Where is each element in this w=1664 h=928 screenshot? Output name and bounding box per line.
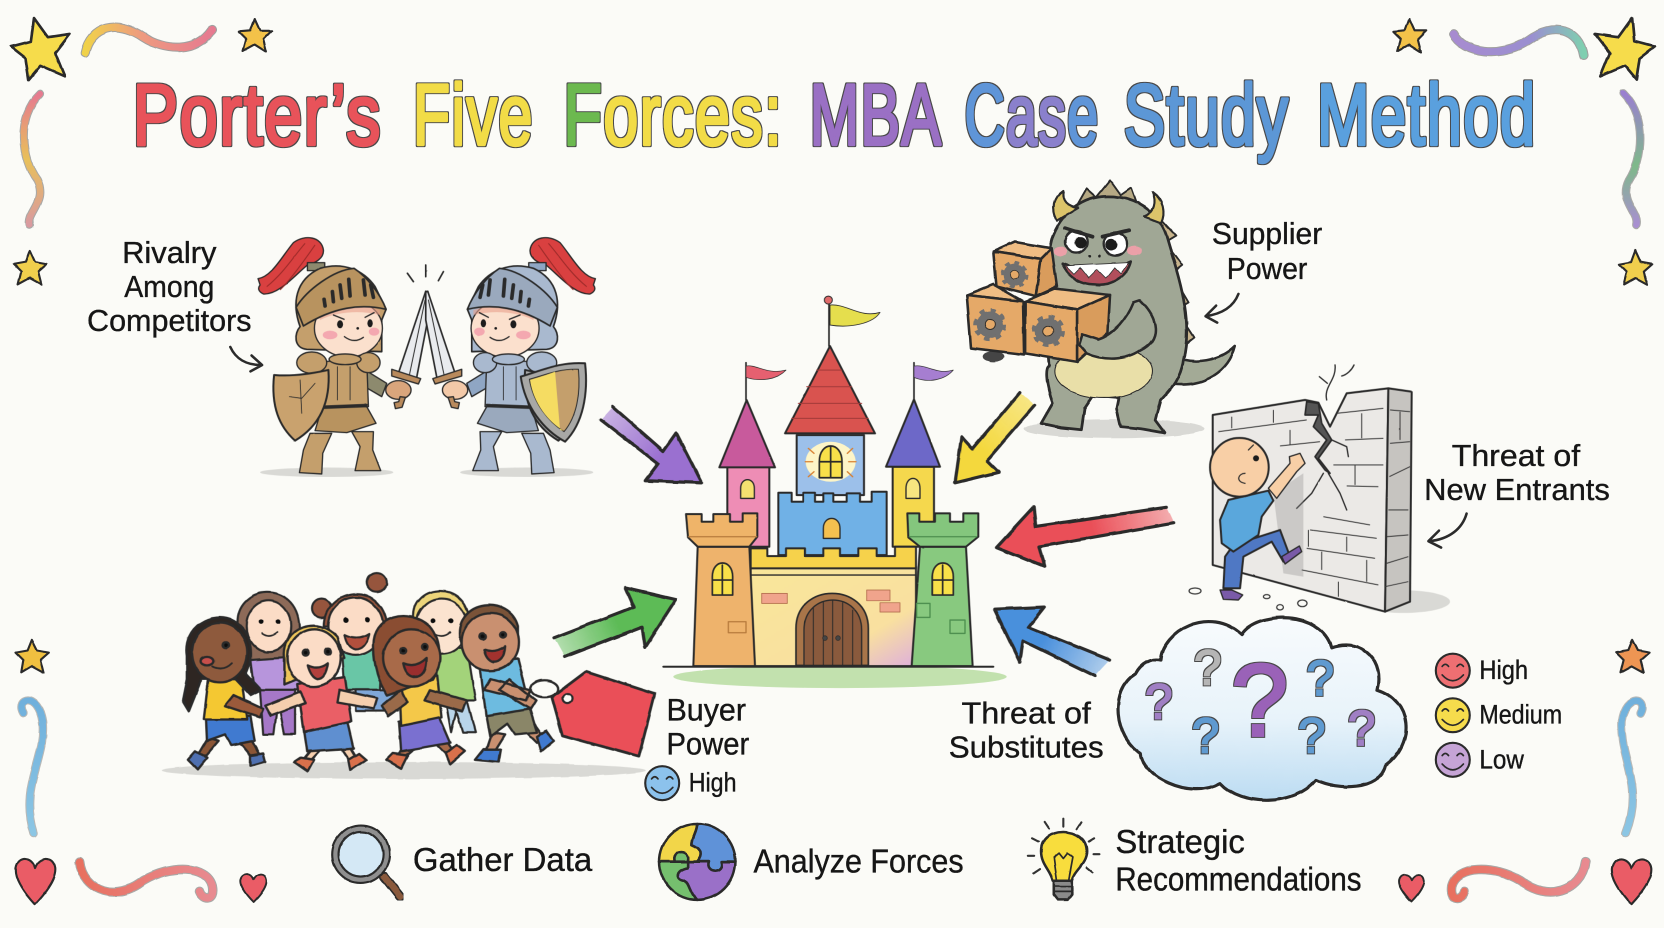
label: rivalry among competitors: Among <box>124 269 214 304</box>
title: Method <box>1317 67 1537 163</box>
icon: puzzle circle <box>659 823 735 900</box>
castle flags <box>746 296 953 400</box>
label: buyer power: Buyer <box>666 692 746 728</box>
star right upper <box>1619 250 1652 284</box>
label: rivalry among competitors: Competitors <box>87 303 252 338</box>
castle right spire tower <box>886 399 940 547</box>
label: rivalry among competitors: Rivalry <box>122 235 217 270</box>
knight right steel <box>426 238 595 477</box>
label: supplier power <box>1212 216 1322 286</box>
swirl left upper <box>24 93 40 225</box>
arrow: new entrants label pointer <box>1428 514 1467 548</box>
monster body <box>1041 196 1187 433</box>
arrow: supplier label pointer <box>1206 294 1238 323</box>
swirl top right <box>1454 30 1583 55</box>
castle illustration <box>663 296 1007 688</box>
knight left bronze <box>258 238 428 477</box>
back kid teal <box>312 573 398 711</box>
step: gather data: Gather Data <box>413 841 593 878</box>
label: buyer power: Power <box>666 725 750 761</box>
monster belly <box>1055 345 1152 398</box>
front kid 4 <box>459 605 554 762</box>
monster eyes <box>1065 231 1087 253</box>
title: Porter’s <box>133 67 382 163</box>
star top right large <box>1595 18 1654 80</box>
question marks: ? <box>1192 709 1219 763</box>
title: MBA <box>810 67 942 163</box>
arrow: purple rivalry <box>601 406 701 483</box>
label: threat of new entrants: New Entrants <box>1424 472 1610 507</box>
monster arm <box>1079 300 1155 359</box>
question marks <box>1145 641 1375 763</box>
monster tail <box>1173 346 1235 385</box>
step: analyze forces: Analyze Forces <box>753 842 964 879</box>
question marks: ? <box>1307 652 1334 706</box>
title <box>133 67 1537 163</box>
swirl left lower <box>22 701 43 833</box>
label: threat of substitutes <box>949 696 1104 765</box>
heart bottom left small <box>241 875 267 902</box>
title: Five <box>413 67 534 163</box>
title: Case <box>965 67 1099 163</box>
star top left small <box>239 19 272 52</box>
icon: light bulb <box>1028 818 1099 900</box>
swirl right upper <box>1624 93 1640 225</box>
star top left large <box>11 18 70 80</box>
buyer power kids illustration <box>161 573 655 779</box>
supplier monster illustration <box>967 180 1235 438</box>
star right lower <box>1616 640 1649 673</box>
castle main wall <box>751 547 916 666</box>
arrow: blue substitutes <box>994 607 1110 676</box>
castle right turret <box>907 513 978 666</box>
question marks: ? <box>1231 643 1288 757</box>
legend item medium: Medium <box>1479 700 1562 730</box>
star left upper <box>14 250 47 284</box>
swirl bottom left <box>80 862 213 898</box>
castle ground line <box>663 664 993 670</box>
front kid 3 <box>373 616 467 768</box>
swirl top left <box>85 27 212 53</box>
monster horns <box>1054 191 1078 221</box>
castle left spire tower <box>719 400 775 547</box>
monster spikes <box>1159 218 1194 350</box>
heart bottom left large <box>16 859 55 904</box>
front kid 2 <box>265 626 377 771</box>
knight right shield <box>521 363 586 442</box>
step: analyze forces <box>659 823 964 900</box>
pebbles <box>1189 588 1307 610</box>
castle blue battlement <box>778 492 887 555</box>
rating: blue high <box>645 766 736 800</box>
back kid blond <box>414 591 475 732</box>
heart bottom right small <box>1399 875 1424 902</box>
substitutes cloud <box>1118 618 1406 800</box>
title: Study <box>1124 67 1289 163</box>
front kid 1 <box>183 617 265 769</box>
wall side face <box>1385 388 1412 612</box>
wall bricks <box>1218 408 1410 597</box>
force arrows <box>554 393 1174 676</box>
wall crack <box>1305 402 1332 473</box>
label: threat of substitutes: Threat of <box>961 696 1091 731</box>
question marks: ? <box>1298 709 1325 763</box>
boxes with gears <box>967 242 1110 362</box>
step: strategic recommendations <box>1028 818 1362 900</box>
step: gather data <box>332 826 593 897</box>
star top right small <box>1393 19 1426 52</box>
arrow: green buyer <box>554 588 676 657</box>
label: rivalry among competitors <box>87 235 252 338</box>
arrow: red new entrants <box>996 507 1174 567</box>
label: supplier power: Power <box>1227 251 1307 286</box>
title: Forces: <box>564 67 783 163</box>
label: threat of substitutes: Substitutes <box>949 730 1104 765</box>
label: buyer power <box>666 692 750 761</box>
rivalry knights illustration <box>258 238 595 477</box>
step: strategic recommendations: Recommendations <box>1115 860 1362 897</box>
back kid purple <box>238 592 302 734</box>
price tag <box>531 672 655 757</box>
new entrants wall illustration <box>1189 365 1450 613</box>
legend item low: Low <box>1479 744 1525 774</box>
step: strategic recommendations: Strategic <box>1115 823 1245 860</box>
question marks: ? <box>1145 675 1172 729</box>
rating: blue high: High <box>689 768 736 798</box>
question marks: ? <box>1348 702 1375 756</box>
castle central keep <box>785 346 875 495</box>
swirl right lower <box>1621 701 1642 833</box>
wall shading <box>1273 473 1303 577</box>
wall front face <box>1213 388 1388 612</box>
icon: magnifying glass <box>332 826 400 897</box>
climbing person <box>1210 438 1305 600</box>
castle grass <box>673 665 1007 688</box>
label: supplier power: Supplier <box>1212 216 1322 251</box>
label: threat of new entrants: Threat of <box>1452 438 1581 473</box>
arrow: yellow supplier <box>955 393 1035 483</box>
monster head spikes <box>1078 180 1138 206</box>
legend item high: High <box>1479 655 1528 685</box>
swirl bottom right <box>1451 862 1585 898</box>
star left lower <box>16 640 49 673</box>
castle left turret <box>686 513 757 666</box>
label: threat of new entrants <box>1424 438 1610 507</box>
monster back arm wheel <box>983 351 1004 362</box>
legend: force intensity <box>1436 654 1562 777</box>
sword clash sparks <box>407 265 443 282</box>
monster mouth <box>1062 261 1131 285</box>
heart bottom right large <box>1612 859 1651 904</box>
arrow: rivalry label pointer <box>230 347 262 371</box>
question marks: ? <box>1194 641 1221 695</box>
